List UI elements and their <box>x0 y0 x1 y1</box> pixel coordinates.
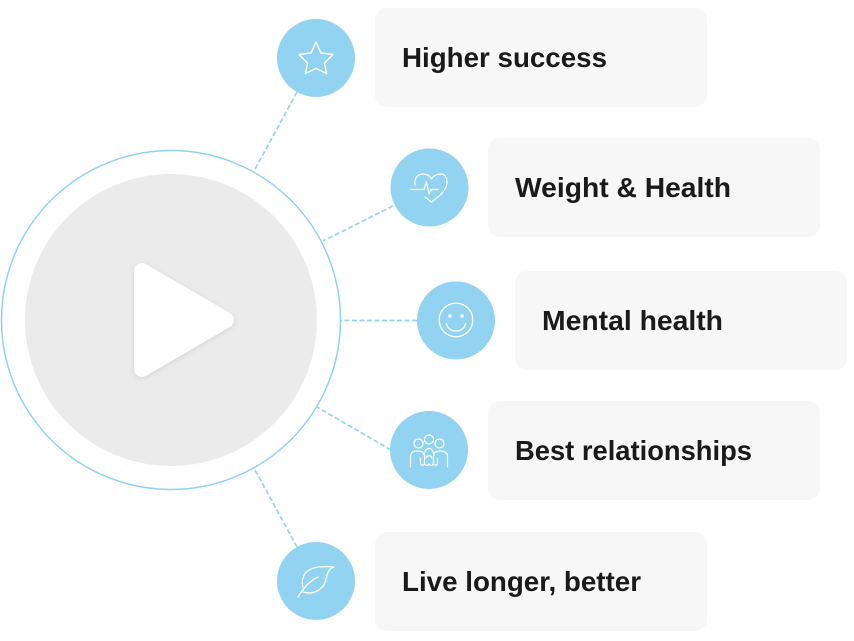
icon circle: star <box>277 19 355 97</box>
label card <box>488 401 820 500</box>
label card <box>488 138 820 237</box>
label card <box>515 271 847 370</box>
connector: heart to play circle <box>323 206 393 241</box>
icon circle: smile <box>417 282 495 360</box>
inner grey disc <box>25 174 317 466</box>
node: Mental health <box>417 271 847 370</box>
node: Live longer, better <box>277 532 707 631</box>
node: Higher success <box>277 8 707 107</box>
label card: Higher success <box>402 42 607 73</box>
node: Best relationships <box>390 401 820 500</box>
label card: Weight & Health <box>515 172 731 203</box>
icon circle: leaf <box>277 542 355 620</box>
icon circle: heart <box>390 148 468 226</box>
connector: star to play circle <box>254 92 297 171</box>
label card: Live longer, better <box>402 566 641 597</box>
connector: leaf to play circle <box>254 468 297 547</box>
play triangle <box>142 271 226 369</box>
label card: Mental health <box>542 305 723 336</box>
play video graphic <box>2 150 340 490</box>
connector: smile to play circle <box>341 320 417 322</box>
icon circle: people <box>390 411 468 489</box>
node: Weight & Health <box>390 138 820 237</box>
label card <box>375 532 707 631</box>
label card: Best relationships <box>515 435 752 466</box>
label card <box>375 8 707 107</box>
connector: people to play circle <box>317 407 391 450</box>
outer ring <box>2 150 340 490</box>
